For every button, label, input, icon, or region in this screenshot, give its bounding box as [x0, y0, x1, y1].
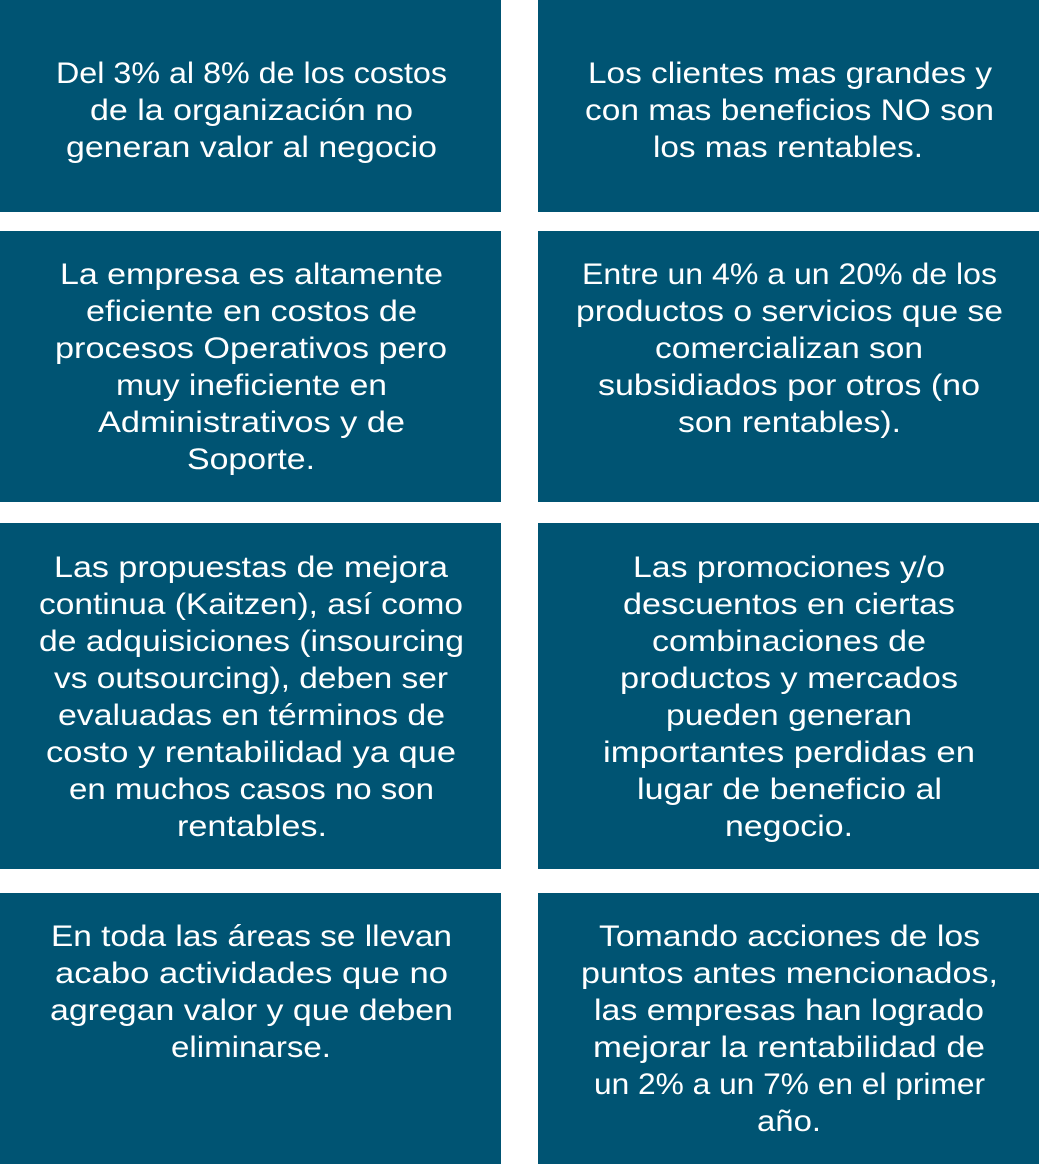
panel: propuestas de mejora: en muchos casos no son	[69, 773, 434, 806]
panel: promociones y descuentos: Las promociones y/o	[633, 551, 945, 584]
panel: mejora de rentabilidad: Tomando acciones de los	[599, 920, 980, 953]
panel: productos subsidiados: comercializan son	[655, 332, 923, 365]
panel: eficiencia en costos: eficiente en costos de	[86, 295, 417, 328]
panel: mejora de rentabilidad	[538, 893, 1039, 1164]
panel: actividades sin valor: eliminarse.	[171, 1031, 331, 1064]
panel: mejora de rentabilidad: año.	[757, 1105, 821, 1138]
panel: mejora de rentabilidad: puntos antes mencionados,	[581, 957, 998, 990]
panel: mejora de rentabilidad: un 2% a un 7% en el primer	[594, 1068, 985, 1101]
panel: promociones y descuentos	[538, 523, 1039, 869]
panel: costos sin valor: generan valor al negocio	[66, 131, 437, 164]
panel: actividades sin valor	[0, 893, 501, 1164]
panel: clientes grandes: con mas beneficios NO son	[585, 94, 994, 127]
panel: propuestas de mejora	[0, 523, 501, 869]
panel: promociones y descuentos: pueden generan	[666, 699, 912, 732]
panel: propuestas de mejora: vs outsourcing), deben ser	[54, 662, 448, 695]
panel: productos subsidiados: Entre un 4% a un 20% de los	[582, 258, 997, 291]
panel: eficiencia en costos: La empresa es altamente	[60, 258, 443, 291]
panel: propuestas de mejora: rentables.	[177, 810, 327, 843]
panel: eficiencia en costos: Administrativos y de	[98, 406, 405, 439]
panel: promociones y descuentos: importantes perdidas en	[603, 736, 975, 769]
panel: actividades sin valor: En toda las áreas se llevan	[51, 920, 452, 953]
panel: promociones y descuentos: lugar de beneficio al	[637, 773, 942, 806]
panel: eficiencia en costos: Soporte.	[187, 443, 315, 476]
panel: propuestas de mejora: continua (Kaitzen), así como	[39, 588, 463, 621]
panel: clientes grandes: Los clientes mas grandes y	[588, 57, 992, 90]
panel: costos sin valor: Del 3% al 8% de los costos	[56, 57, 447, 90]
panel: propuestas de mejora: evaluadas en términos de	[58, 699, 445, 732]
panel: eficiencia en costos: procesos Operativos pero	[55, 332, 447, 365]
panel: clientes grandes	[538, 0, 1039, 212]
panel: promociones y descuentos: negocio.	[725, 810, 853, 843]
panel: productos subsidiados: subsidiados por otros (no	[598, 369, 980, 402]
panel: eficiencia en costos	[0, 231, 501, 502]
panel: costos sin valor: de la organización no	[90, 94, 413, 127]
panel: mejora de rentabilidad: las empresas han logrado	[594, 994, 984, 1027]
panel: eficiencia en costos: muy ineficiente en	[116, 369, 387, 402]
panel: productos subsidiados: productos o servicios que se	[576, 295, 1003, 328]
panel: propuestas de mejora: Las propuestas de mejora	[54, 551, 448, 584]
panel: propuestas de mejora: de adquisiciones (insourcing	[39, 625, 464, 658]
panel: promociones y descuentos: productos y mercados	[620, 662, 958, 695]
panel: propuestas de mejora: costo y rentabilidad ya que	[46, 736, 456, 769]
panel: promociones y descuentos: combinaciones de	[652, 625, 926, 658]
panel: productos subsidiados: son rentables).	[678, 406, 901, 439]
panel: promociones y descuentos: descuentos en ciertas	[623, 588, 955, 621]
panel: mejora de rentabilidad: mejorar la rentabilidad de	[593, 1031, 985, 1064]
panel: productos subsidiados	[538, 231, 1039, 502]
panel: actividades sin valor: acabo actividades que no	[55, 957, 448, 990]
panel: clientes grandes: los mas rentables.	[653, 131, 923, 164]
panel: costos sin valor	[0, 0, 501, 212]
panel: actividades sin valor: agregan valor y que deben	[50, 994, 453, 1027]
